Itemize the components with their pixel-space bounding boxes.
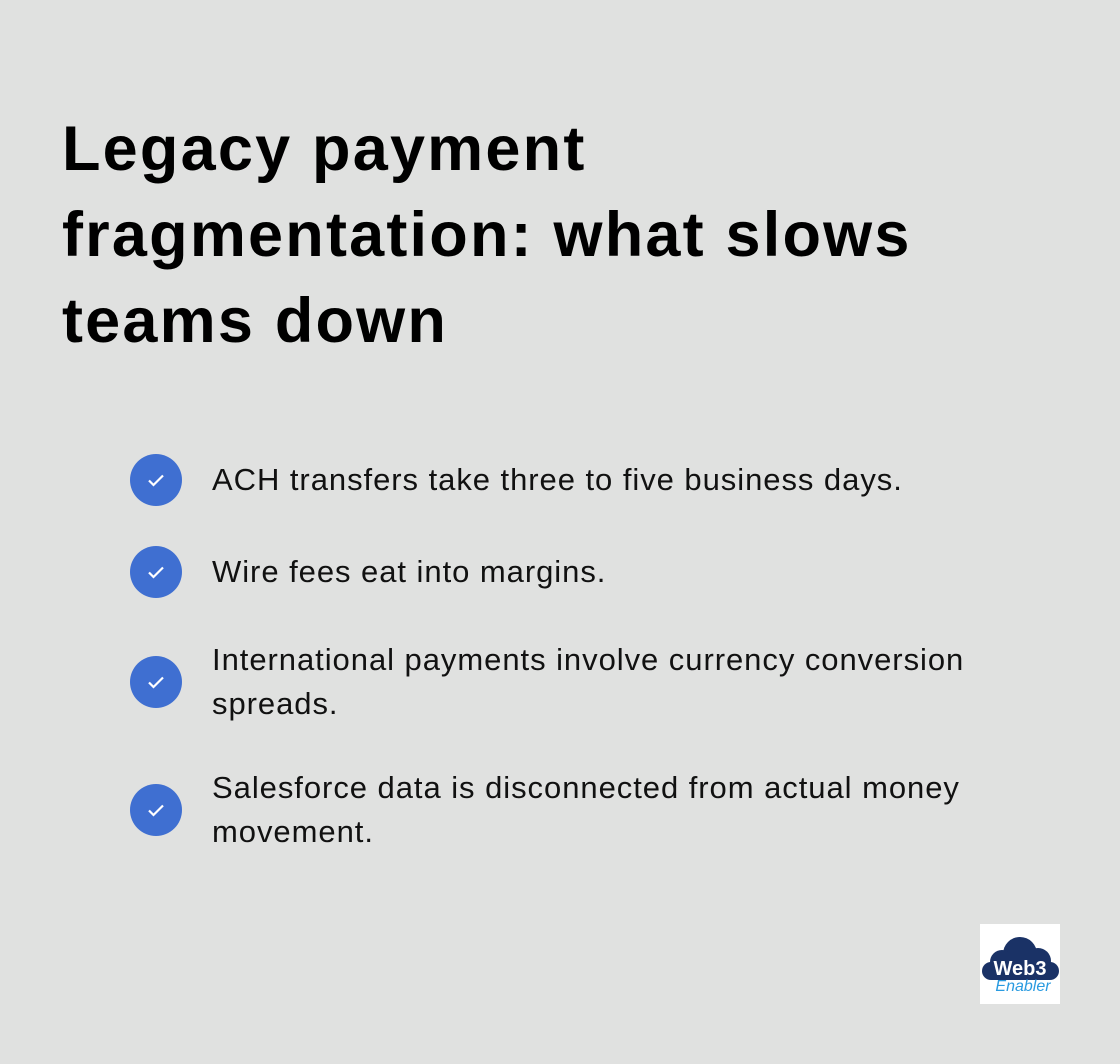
text: Wire fees eat into margins. (212, 554, 606, 589)
list item 4 (130, 770, 960, 849)
text: Salesforce data is disconnected from actual money (212, 770, 960, 805)
icon: check (130, 656, 182, 708)
text (212, 642, 964, 721)
list item 1 (130, 454, 903, 506)
title: fragmentation: what slows (62, 200, 912, 270)
list item 3 (130, 642, 964, 721)
title: Legacy payment (62, 114, 586, 184)
icon: check (130, 454, 182, 506)
text: International payments involve currency conversion (212, 642, 964, 677)
logo: Web3 (994, 958, 1046, 980)
text: ACH transfers take three to five business days. (212, 462, 903, 497)
text (212, 770, 960, 849)
logo (980, 924, 1060, 1004)
title (62, 114, 912, 356)
logo: Enabler (995, 978, 1051, 995)
title: teams down (62, 286, 448, 356)
list item 2 (130, 546, 606, 598)
text: movement. (212, 814, 374, 849)
icon: check (130, 784, 182, 836)
icon: check (130, 546, 182, 598)
text: spreads. (212, 686, 338, 721)
